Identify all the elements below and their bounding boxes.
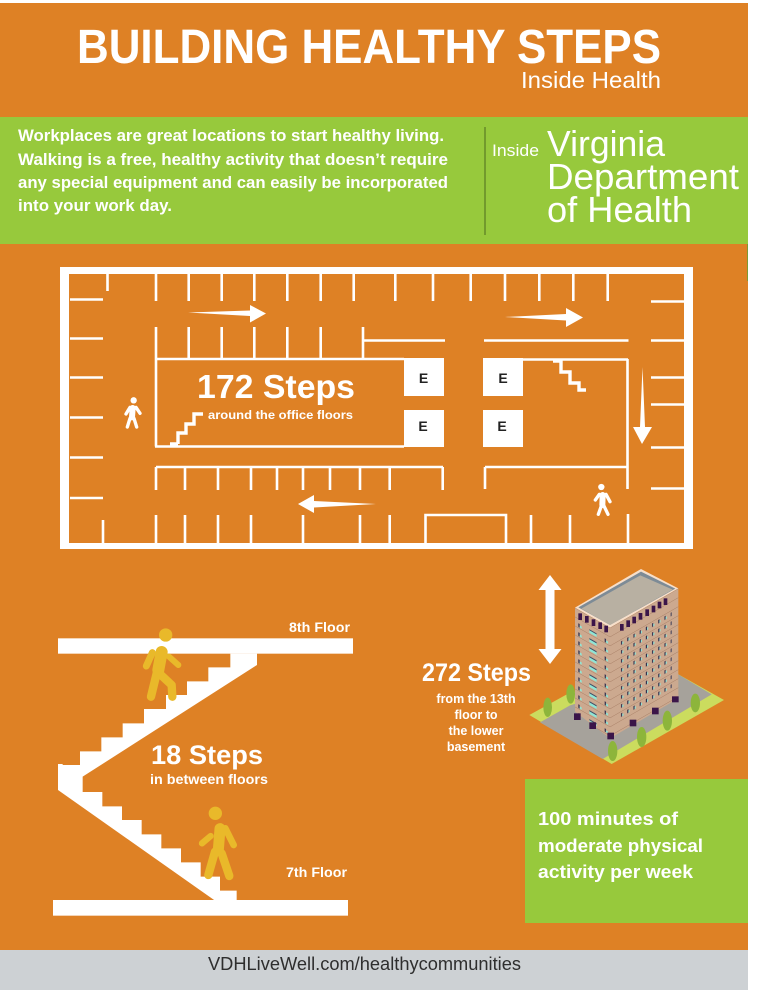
staircase shape xyxy=(53,638,353,916)
organisation name xyxy=(492,123,739,230)
heading: 272 steps: 272 Steps xyxy=(422,659,531,687)
subtitle: Inside Health xyxy=(521,67,661,93)
label: 7th floor: 7th Floor xyxy=(286,864,348,880)
base blocks xyxy=(574,696,679,739)
caption: from the 13th floor xyxy=(436,692,516,754)
caption: from the 13th floor: from the 13th xyxy=(436,692,516,706)
stair icon: right xyxy=(553,361,586,390)
organisation name: of Health xyxy=(547,189,692,230)
arrow: down, right xyxy=(633,367,652,444)
roof xyxy=(575,569,678,628)
caption: from the 13th floor: basement xyxy=(447,740,506,754)
building left face xyxy=(575,608,610,738)
elevators: E xyxy=(418,418,428,434)
building right face xyxy=(610,588,678,738)
elevators xyxy=(404,358,523,447)
heading: 172 steps: 172 Steps xyxy=(197,368,355,405)
staircase diagram xyxy=(53,619,353,916)
elevators: E xyxy=(498,370,508,386)
icon: walker upper xyxy=(146,628,178,697)
heading: 18 steps: 18 Steps xyxy=(151,740,263,770)
intro text: any special equipment and can easily be incorporated xyxy=(18,173,448,192)
caption: around the office floors: around the office floors xyxy=(208,408,353,422)
arrow: left, bottom xyxy=(298,495,376,513)
organisation name: Virginia xyxy=(547,123,666,164)
intro text: Workplaces are great locations to start healthy living. xyxy=(18,126,444,145)
arrow: right, top right xyxy=(505,308,583,327)
organisation name: Department xyxy=(547,156,739,197)
elevators: E xyxy=(497,418,507,434)
caption: from the 13th floor: the lower xyxy=(449,724,504,738)
panel: activity callout: activity per week xyxy=(538,862,694,882)
top row windows xyxy=(578,598,667,632)
label: 8th floor: 8th Floor xyxy=(289,619,351,635)
panel: activity callout: moderate physical xyxy=(538,836,703,856)
icon: walker right xyxy=(595,484,610,514)
panel: intro banner xyxy=(0,117,748,281)
panel: activity callout: 100 minutes of xyxy=(538,809,679,829)
footer xyxy=(0,950,748,990)
stair icon: left xyxy=(170,414,203,444)
arrow: double vertical xyxy=(538,575,562,664)
panel: activity callout xyxy=(525,779,748,923)
caption: from the 13th floor: floor to xyxy=(454,708,498,722)
icon: walker left xyxy=(126,397,140,427)
floor plan xyxy=(60,267,693,549)
elevators: E xyxy=(419,370,428,386)
organisation name: Inside xyxy=(492,141,539,160)
footer: VDHLiveWell.com/healthycommunities xyxy=(208,954,521,974)
trees xyxy=(543,684,700,761)
ground xyxy=(529,673,724,764)
intro text: into your work day. xyxy=(18,196,172,215)
intro text xyxy=(18,126,448,215)
title: BUILDING HEALTHY STEPS xyxy=(77,21,661,74)
caption: in between floors: in between floors xyxy=(150,771,268,787)
building illustration xyxy=(529,569,724,764)
intro text: Walking is a free, healthy activity that doesn’t require xyxy=(18,150,448,169)
icon: walker lower xyxy=(202,807,234,876)
arrow: right, top left xyxy=(188,305,266,322)
building xyxy=(574,569,679,739)
